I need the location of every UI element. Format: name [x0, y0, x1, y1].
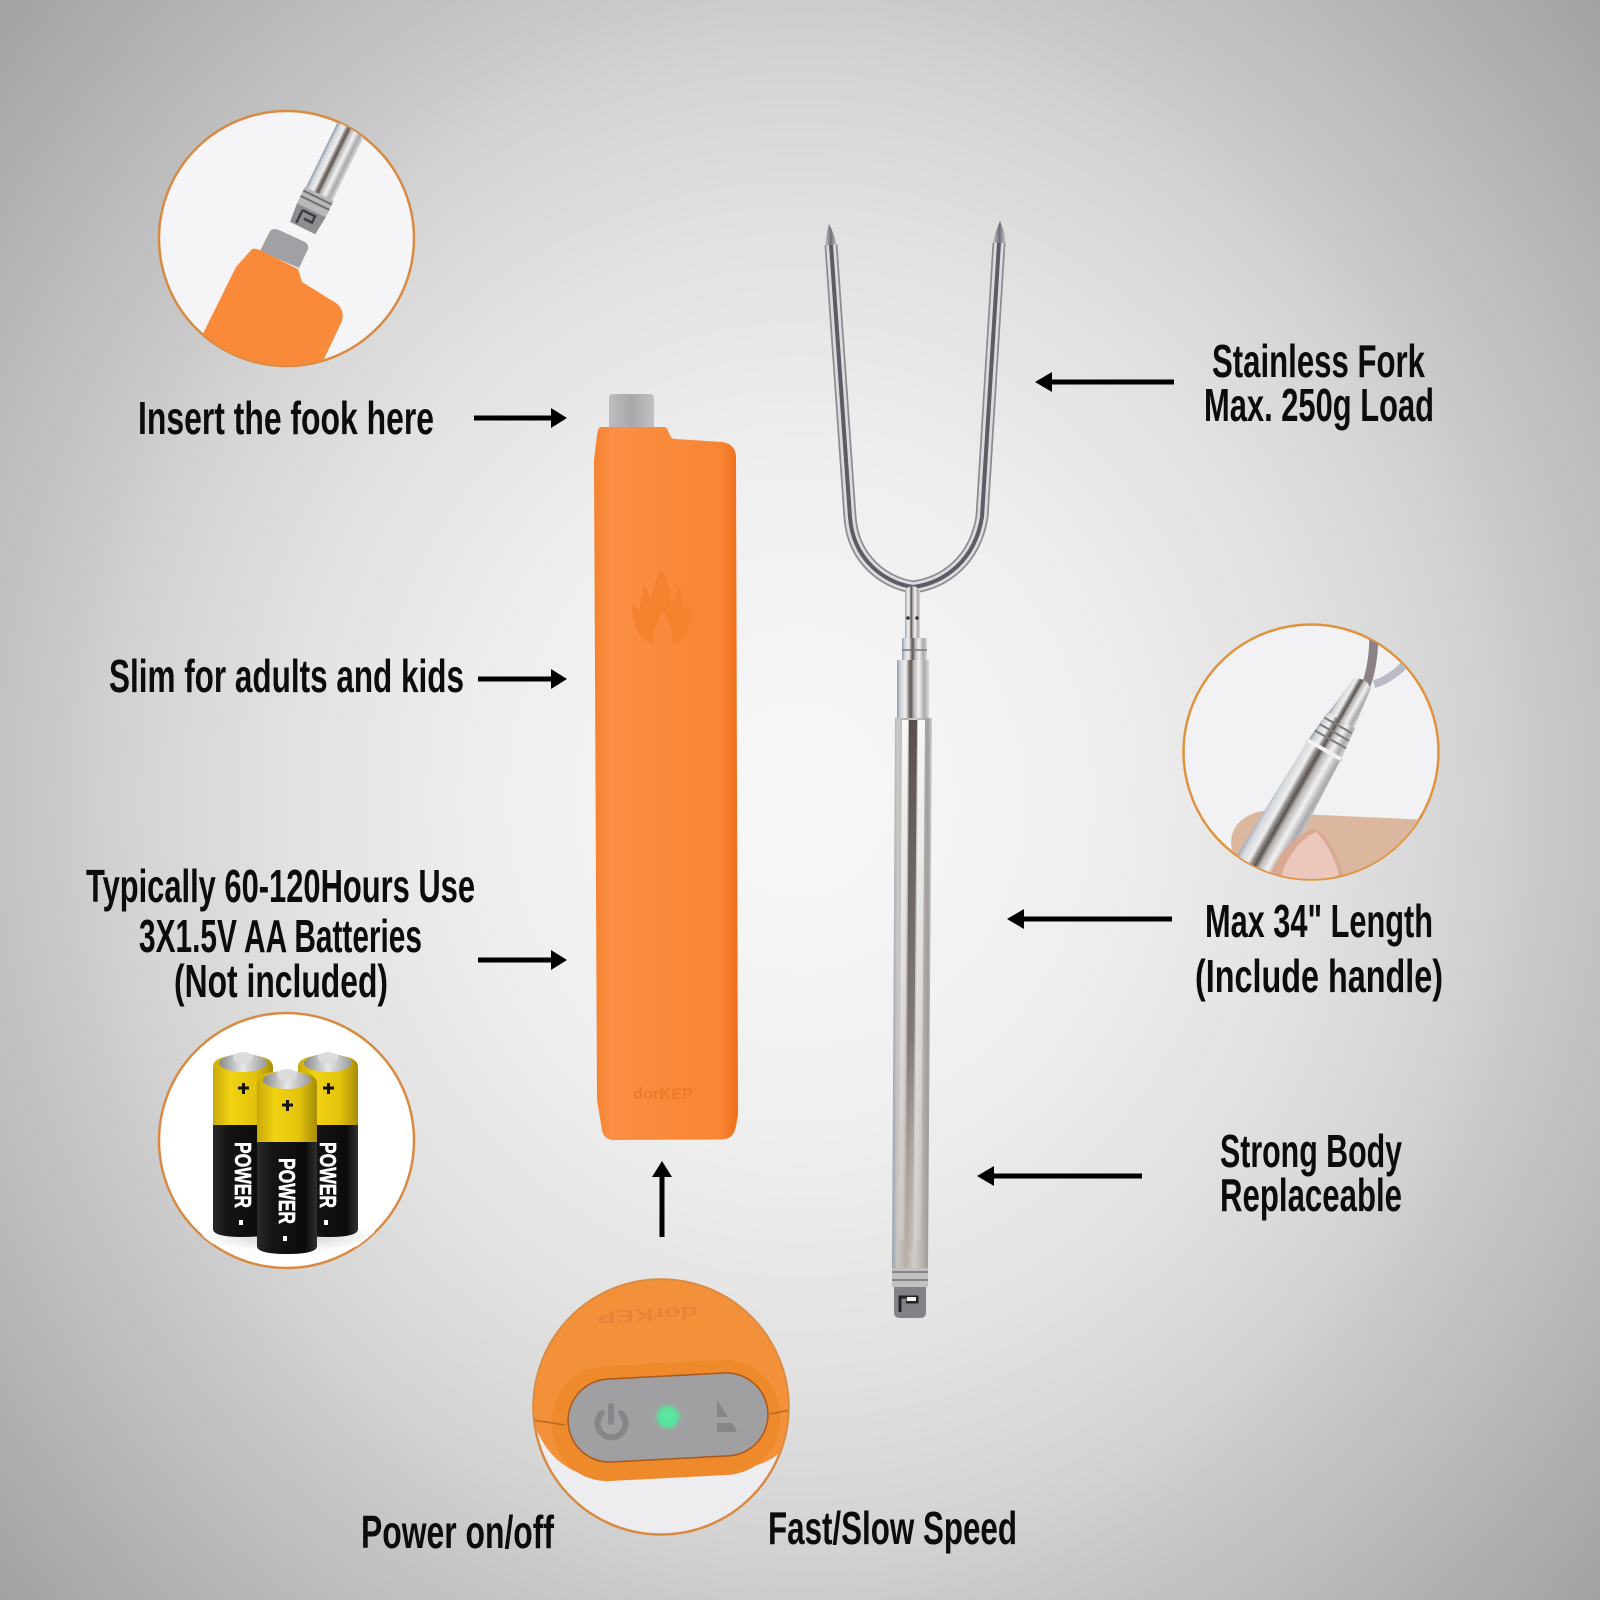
rod sections	[905, 586, 920, 638]
arrow: insert	[474, 408, 567, 428]
battery: front: POWER	[274, 1158, 300, 1224]
arrow: slim	[478, 669, 567, 689]
label: insert the fork: Insert the fook here	[138, 392, 434, 444]
label: battery info: 3X1.5V AA Batteries	[139, 910, 422, 962]
grey connector	[609, 394, 654, 430]
label: battery info: (Not included)	[174, 955, 388, 1007]
orange handle	[594, 394, 738, 1140]
label: battery info	[86, 860, 475, 1007]
seam	[533, 1410, 790, 1425]
back finger	[1231, 811, 1418, 879]
battery: back right	[298, 1052, 358, 1237]
icon: speed	[717, 1400, 737, 1432]
panel: batteries circle	[159, 1013, 414, 1268]
label: battery info: Typically 60-120Hours Use	[86, 860, 475, 912]
arrow: power buttons up	[652, 1161, 672, 1237]
orange end in detail	[534, 1280, 788, 1480]
thumb nail	[1281, 832, 1339, 879]
flame emboss	[632, 570, 692, 645]
label: strong body	[1220, 1125, 1402, 1221]
panel: grip detail circle	[1184, 624, 1438, 903]
icon: power	[598, 1406, 626, 1437]
fork end in detail	[290, 122, 364, 234]
handle body	[594, 427, 738, 1140]
rod dark strip	[906, 720, 917, 1250]
label: stainless fork: Max. 250g Load	[1204, 379, 1434, 431]
label: speed: Fast/Slow Speed	[768, 1502, 1017, 1554]
rod end cap	[894, 1287, 926, 1318]
panel: insert detail circle	[158, 110, 416, 368]
fork prongs	[831, 243, 999, 587]
label: length: (Include handle)	[1195, 950, 1443, 1002]
orange handle in detail	[203, 248, 343, 366]
battery: back left	[213, 1052, 273, 1237]
rod in detail	[1237, 678, 1371, 876]
icon: LED	[654, 1404, 682, 1430]
rod shine	[899, 720, 908, 1240]
grey connector in detail	[260, 229, 308, 268]
battery: back right: POWER	[315, 1142, 341, 1208]
shadow under batteries	[202, 1231, 375, 1248]
battery: front	[257, 1069, 317, 1254]
label: stainless fork	[1204, 335, 1434, 431]
fork prongs in detail	[1366, 630, 1374, 686]
rod end rings	[892, 1268, 928, 1287]
arrow: fork	[1035, 372, 1174, 392]
battery: back left: POWER	[230, 1142, 256, 1208]
label: length: Max 34" Length	[1205, 895, 1433, 947]
arrow: length	[1007, 909, 1172, 929]
thumb	[1271, 828, 1344, 879]
fork tips	[825, 224, 837, 248]
label: strong body: Replaceable	[1220, 1169, 1402, 1221]
label: slim: Slim for adults and kids	[109, 650, 464, 702]
logo emboss: dorKEP	[633, 1086, 693, 1103]
arrow: body	[977, 1166, 1142, 1186]
label: stainless fork: Stainless Fork	[1212, 335, 1425, 387]
label: length	[1195, 895, 1443, 1002]
grey button pad	[566, 1371, 770, 1464]
label: power: Power on/off	[361, 1506, 554, 1558]
label: strong body: Strong Body	[1220, 1125, 1402, 1177]
rod right shine	[915, 720, 925, 1240]
arrow: battery	[478, 950, 567, 970]
telescoping fork	[825, 221, 1006, 1318]
panel: control buttons circle	[532, 1278, 790, 1536]
rim	[549, 1357, 783, 1484]
logo on end: dorKEP	[597, 1302, 698, 1327]
